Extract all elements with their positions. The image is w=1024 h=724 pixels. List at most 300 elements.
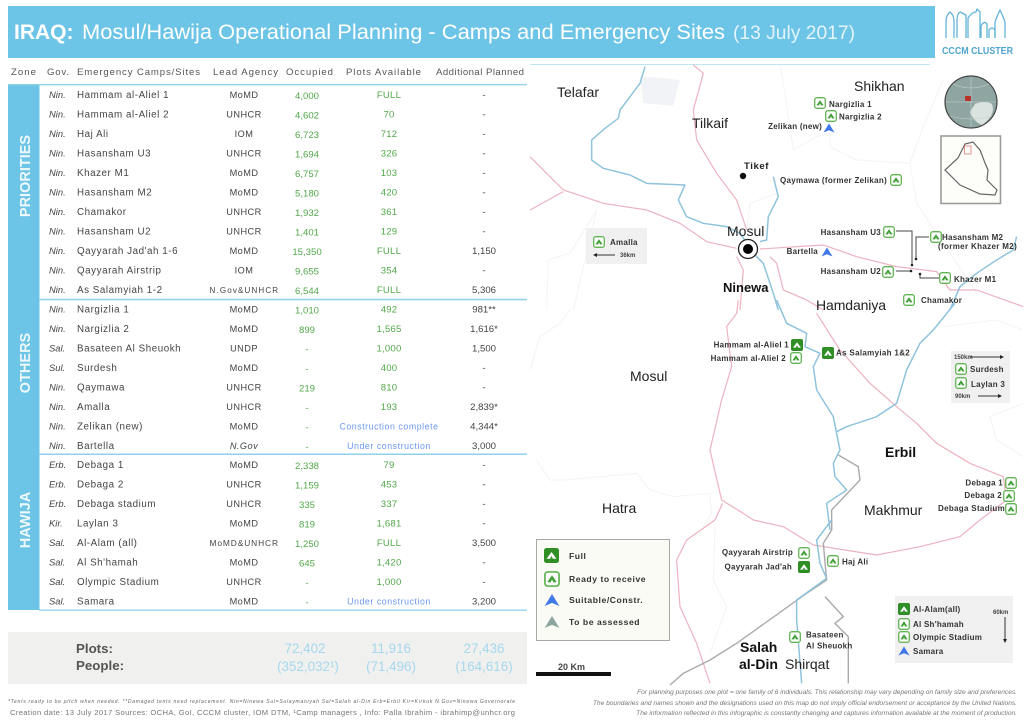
row: Debaga stadium: 335 xyxy=(299,500,315,511)
totals panel: (71,496) xyxy=(366,659,416,674)
row: Hasansham U2 xyxy=(49,226,486,238)
row: Samara: Under construction xyxy=(347,596,431,606)
row: Hasansham U3: Nin. xyxy=(49,148,66,159)
off-map callout: Surdesh and Laylan 3: Surdesh xyxy=(970,365,1004,374)
totals panel: People: xyxy=(76,658,124,673)
totals panel: 11,916 xyxy=(371,641,411,656)
row: Khazer M1 xyxy=(49,167,486,180)
camp: Hasansham U3 xyxy=(821,227,913,266)
row: Nargizlia 2: Nin. xyxy=(49,323,66,334)
map: district and governorate labels: Hatra xyxy=(602,500,636,516)
row: Nargizlia 2: MoMD xyxy=(230,324,258,334)
row: Amalla: - xyxy=(305,403,309,414)
row: Al-Alam (all) xyxy=(49,537,496,550)
table column headers: Additional Planned xyxy=(436,67,524,78)
row: Chamakor: - xyxy=(482,207,486,218)
row: Qaymawa xyxy=(49,381,486,394)
row: As Salamyiah 1-2 xyxy=(49,284,496,297)
camp: Basateen Al Sheuokh: Basateen xyxy=(806,630,844,640)
row: Zelikan (new): - xyxy=(305,422,309,433)
row: As Salamyiah 1-2: 5,306 xyxy=(472,285,496,296)
row: Al-Alam (all): Sal. xyxy=(49,537,65,548)
camp: Amalla xyxy=(586,228,647,264)
row: As Salamyiah 1-2: Nin. xyxy=(49,284,66,295)
row: Haj Ali: Nin. xyxy=(49,128,66,139)
row: Hasansham U2: 1,401 xyxy=(295,228,319,238)
camp: Nargizlia 2 xyxy=(826,111,882,122)
map: Mosul city marker xyxy=(727,223,764,258)
row: Zelikan (new): Zelikan (new) xyxy=(77,421,143,432)
row: Hammam al-Aliel 1: Hammam al-Aliel 1 xyxy=(77,90,169,101)
row: Bartella: N.Gov xyxy=(230,441,259,451)
row: Zelikan (new): MoMD xyxy=(230,421,258,431)
camp: Hammam al-Aliel 1 xyxy=(714,339,803,351)
row: Laylan 3: MoMD xyxy=(230,519,258,529)
row: Qayyarah Jad'ah 1-6 xyxy=(49,245,496,258)
row: Debaga 2: - xyxy=(482,480,486,491)
legend: to be assessed: To be assessed xyxy=(569,617,640,627)
row: Qaymawa: - xyxy=(482,382,486,393)
footnotes: Creation date: 13 July 2017 Sources: OCHA, GoI, CCCM cluster, IOM DTM, ¹Camp managers , Info: Palla Ibrahim - ibrahimp@unhcr.org xyxy=(10,708,515,717)
row: Al-Alam (all): 1,250 xyxy=(295,539,319,550)
row: Nargizlia 1 xyxy=(49,304,496,317)
row: Hammam al-Aliel 1: FULL xyxy=(377,90,402,101)
totals panel: (352,032¹) xyxy=(277,659,339,674)
row: Olympic Stadium: - xyxy=(305,578,309,589)
row: Nargizlia 1: 492 xyxy=(381,305,397,316)
row: Hasansham M2: 420 xyxy=(381,188,397,199)
map: district and governorate labels: Mosul xyxy=(630,368,667,384)
row: Qayyarah Airstrip: Nin. xyxy=(49,264,66,276)
legend: suitable: Suitable/Constr. xyxy=(569,595,643,605)
map: district and governorate labels: Hamdaniya xyxy=(816,297,886,313)
camp: Basateen Al Sheuokh: Al Sheuokh xyxy=(806,642,853,650)
zone label: others: OTHERS xyxy=(18,332,34,393)
row: Debaga 1: 2,338 xyxy=(295,461,319,472)
row: Khazer M1: Khazer M1 xyxy=(77,168,129,179)
row: Basateen Al Sheuokh: 1,000 xyxy=(376,344,402,354)
camp: Hasansham M2: (former Khazer M2) xyxy=(938,242,1017,251)
camp: Amalla: Amalla xyxy=(610,238,638,247)
table column headers: Lead Agency xyxy=(213,67,278,78)
camp: Hasansham M2: Hasansham M2 xyxy=(942,233,1004,242)
off-map callout: Surdesh and Laylan 3 xyxy=(951,351,1010,403)
row: Hasansham U3: 326 xyxy=(381,149,397,160)
locator: Iraq inset xyxy=(941,136,1000,204)
row: Qayyarah Airstrip: IOM xyxy=(235,266,253,276)
row: Qayyarah Jad'ah 1-6: 1,150 xyxy=(472,246,496,257)
row: As Salamyiah 1-2: N.Gov&UNHCR xyxy=(210,286,278,295)
camp: Hasansham U2: Hasansham U2 xyxy=(821,267,881,276)
zone label: hawija: HAWIJA xyxy=(18,491,34,548)
camps table rows xyxy=(49,89,498,608)
row: Debaga 1 xyxy=(49,459,486,472)
row: Chamakor: Chamakor xyxy=(77,207,127,218)
row: Bartella: - xyxy=(305,442,309,453)
row: Hasansham M2: - xyxy=(482,188,486,199)
row: Khazer M1: - xyxy=(482,168,486,179)
row: Al-Alam (all): FULL xyxy=(377,538,402,549)
row: Laylan 3: 1,681 xyxy=(376,519,402,530)
row: Qayyarah Jad'ah 1-6: FULL xyxy=(377,246,402,257)
camp: Haj Ali xyxy=(828,556,868,566)
row: Amalla: 2,839* xyxy=(470,402,498,413)
row: Zelikan (new): 4,344* xyxy=(470,421,498,432)
camp: Qayyarah Jad'ah xyxy=(725,561,810,573)
row: Qayyarah Jad'ah 1-6: MoMD xyxy=(230,246,258,256)
footnotes: *Tents ready to be pitch when needed. **Damaged tents need replacement. Nin=Ninewa Sul=Sulaymaniyah Sal=Salah al-Din Erb=Erbil Kir=Kirkuk N.Gov=Ninewa Governorate xyxy=(8,699,515,705)
row: Hasansham M2: Hasansham M2 xyxy=(77,188,152,199)
table column headers: Emergency Camps/Sites xyxy=(77,67,200,78)
row: Debaga 2: Debaga 2 xyxy=(77,480,124,491)
map: district and governorate labels: Erbil xyxy=(885,444,916,460)
row: Hammam al-Aliel 1 xyxy=(49,89,486,102)
camp: Haj Ali: Haj Ali xyxy=(842,558,868,566)
camp: Qayyarah Airstrip xyxy=(722,548,809,558)
map: rivers xyxy=(592,67,1017,683)
row: Surdesh xyxy=(49,362,486,375)
camp: Zelikan (new): Zelikan (new) xyxy=(768,122,822,131)
row: Laylan 3: 819 xyxy=(299,520,315,531)
row: Debaga 2: 453 xyxy=(381,480,397,491)
row: Nargizlia 1: MoMD xyxy=(230,305,258,315)
map disclaimer xyxy=(593,689,1017,717)
row: Hasansham U2: 129 xyxy=(381,226,397,238)
map disclaimer: The boundaries and names shown and the designations used on this map do not imply official endorsement or acceptance by the United Nations. xyxy=(593,700,1017,707)
row: Khazer M1: MoMD xyxy=(230,168,258,178)
row: Haj Ali: IOM xyxy=(235,129,253,139)
map legend xyxy=(536,540,670,640)
camp: Hasansham U2 xyxy=(821,267,912,277)
row: Amalla: Amalla xyxy=(77,402,110,413)
row: Debaga stadium xyxy=(49,498,486,511)
row: Hammam al-Aliel 2: 4,602 xyxy=(295,110,319,122)
row: Nargizlia 1: Nargizlia 1 xyxy=(77,305,129,316)
row: Olympic Stadium: Sal. xyxy=(49,576,65,587)
off-map callout: Al-Alam group: Olympic Stadium xyxy=(913,633,982,642)
row: Al Sh'hamah: Al Sh'hamah xyxy=(77,558,138,568)
row: Nargizlia 2: 1,565 xyxy=(376,324,402,335)
row: Al Sh'hamah: MoMD xyxy=(230,558,258,568)
camp: Hasansham M2 xyxy=(915,232,1017,260)
row: Hasansham U2: Nin. xyxy=(49,226,66,236)
map: grey roads xyxy=(670,455,860,685)
row: Olympic Stadium: 1,000 xyxy=(376,577,402,588)
row: Surdesh: - xyxy=(305,364,309,375)
row: Basateen Al Sheuokh xyxy=(49,342,496,356)
row: Qaymawa: Qaymawa xyxy=(77,382,125,393)
camp: Zelikan (new) xyxy=(768,122,834,132)
table column headers: Gov. xyxy=(47,67,69,78)
row: Qayyarah Airstrip: Qayyarah Airstrip xyxy=(77,266,162,276)
camp: Debaga 2 xyxy=(964,491,1014,501)
row: Hammam al-Aliel 2: UNHCR xyxy=(226,110,262,120)
row: Hasansham U2: UNHCR xyxy=(226,226,262,236)
row: Qaymawa: 219 xyxy=(299,383,315,394)
row: Hasansham U3: UNHCR xyxy=(226,149,262,159)
row: Surdesh: Sul. xyxy=(49,362,65,373)
row: As Salamyiah 1-2: 6,544 xyxy=(295,286,320,297)
row: Laylan 3: Kir. xyxy=(49,518,63,529)
row: Chamakor: 1,932 xyxy=(295,208,319,219)
row: Basateen Al Sheuokh: Basateen Al Sheuokh xyxy=(77,344,181,354)
legend: full: Full xyxy=(569,551,586,561)
map: district and governorate labels: al-Din xyxy=(739,656,778,672)
row: As Salamyiah 1-2: As Salamyiah 1-2 xyxy=(77,285,163,296)
row: Nargizlia 1: Nin. xyxy=(49,304,66,315)
camp: Nargizlia 1: Nargizlia 1 xyxy=(829,100,872,109)
row: Olympic Stadium: - xyxy=(482,577,486,588)
row: Khazer M1: Nin. xyxy=(49,167,66,178)
row: Zelikan (new): Nin. xyxy=(49,420,66,431)
row: Debaga 2: 1,159 xyxy=(295,481,319,492)
map: top border line xyxy=(530,64,930,65)
camp: Chamakor: Chamakor xyxy=(921,296,962,305)
row: Hammam al-Aliel 2: Hammam al-Aliel 2 xyxy=(77,110,169,120)
row: Hammam al-Aliel 1: 4,000 xyxy=(295,91,319,102)
row: Samara: Sal. xyxy=(49,596,65,606)
row: Samara: - xyxy=(305,598,309,608)
off-map callout: Surdesh and Laylan 3: Laylan 3 xyxy=(971,380,1005,389)
off-map callout: Al-Alam group: Al-Alam(all) xyxy=(913,605,961,614)
locator: globe xyxy=(945,76,997,128)
row: Chamakor: Nin. xyxy=(49,206,66,217)
row: Hammam al-Aliel 1: MoMD xyxy=(230,90,258,100)
row: Bartella xyxy=(49,440,496,453)
map: district and governorate labels: Ninewa xyxy=(723,280,769,295)
row: Amalla xyxy=(49,401,498,414)
row: Qayyarah Airstrip: 354 xyxy=(381,266,398,276)
map: roads xyxy=(530,65,1023,683)
row: Debaga stadium: Erb. xyxy=(49,498,66,509)
row: Samara: Samara xyxy=(77,596,115,608)
camp: Debaga 2: Debaga 2 xyxy=(964,491,1002,500)
camp: Hasansham U3: Hasansham U3 xyxy=(821,228,881,237)
title banner: IRAQ: xyxy=(14,21,74,44)
footnotes xyxy=(8,699,515,717)
off-map callout: Surdesh and Laylan 3: 150km xyxy=(954,355,973,361)
row: Debaga 1: Debaga 1 xyxy=(77,460,124,471)
camp: Hammam al-Aliel 2: Hammam al-Aliel 2 xyxy=(711,354,786,363)
row: Hammam al-Aliel 2: - xyxy=(482,110,486,120)
row: Qayyarah Jad'ah 1-6: 15,350 xyxy=(292,247,322,258)
row: Chamakor: 361 xyxy=(381,207,397,218)
row: Samara: MoMD xyxy=(230,596,258,606)
row: Laylan 3: - xyxy=(482,519,486,530)
row: Chamakor: UNHCR xyxy=(226,207,262,217)
row: Debaga stadium: 337 xyxy=(381,499,397,510)
row: Al Sh'hamah: 1,420 xyxy=(376,558,402,568)
row: Hasansham M2: MoMD xyxy=(230,188,258,198)
row: Debaga 2: UNHCR xyxy=(226,480,262,490)
row: Basateen Al Sheuokh: - xyxy=(305,344,309,356)
zone label: priorities: PRIORITIES xyxy=(18,135,34,217)
camp: Nargizlia 2: Nargizlia 2 xyxy=(839,112,882,122)
camp: Basateen Al Sheuokh xyxy=(790,630,853,650)
row: Surdesh: 400 xyxy=(381,363,397,374)
row: Chamakor xyxy=(49,206,486,219)
camp: Chamakor xyxy=(904,295,962,305)
row: Basateen Al Sheuokh: 1,500 xyxy=(472,344,496,354)
camp: Nargizlia 1 xyxy=(815,98,872,109)
row: Nargizlia 2: Nargizlia 2 xyxy=(77,324,129,335)
row: Hammam al-Aliel 2: 70 xyxy=(383,110,395,120)
row: Debaga 1: MoMD xyxy=(230,460,258,470)
scale bar: 20 Km xyxy=(558,662,585,672)
map: district and governorate labels xyxy=(557,78,923,672)
camp: Debaga Stadium: Debaga Stadium xyxy=(938,504,1005,513)
row: Al-Alam (all): Al-Alam (all) xyxy=(77,538,138,549)
row: Nargizlia 2 xyxy=(49,323,498,336)
row: Haj Ali: 712 xyxy=(381,129,397,140)
row: Nargizlia 1: 981** xyxy=(472,305,496,316)
row: Surdesh: MoMD xyxy=(230,363,258,373)
map: district boundaries xyxy=(530,65,1023,653)
title banner: (13 July 2017) xyxy=(733,23,855,44)
scale bar xyxy=(536,662,611,676)
row: Al-Alam (all): 3,500 xyxy=(472,538,496,549)
camp: Bartella xyxy=(787,247,832,256)
row: Haj Ali: - xyxy=(482,129,486,140)
row: As Salamyiah 1-2: FULL xyxy=(377,285,402,296)
camp: Debaga 1 xyxy=(965,478,1016,488)
row: Bartella: Bartella xyxy=(77,441,115,452)
map: district and governorate labels: Shikhan xyxy=(854,78,905,94)
row: Al-Alam (all): MoMD&UNHCR xyxy=(210,538,278,548)
row: Hasansham U3: 1,694 xyxy=(295,150,320,161)
row: Zelikan (new): Construction complete xyxy=(339,421,439,431)
row: Debaga 2: Erb. xyxy=(49,479,66,490)
map: district and governorate labels: Makhmur xyxy=(864,502,923,518)
off-map callout: Al-Alam group: 60km xyxy=(993,610,1008,616)
icon: CCCM cluster logo xyxy=(942,9,1014,57)
row: Debaga 1: 79 xyxy=(383,460,395,471)
row: Debaga 2 xyxy=(49,479,486,492)
map disclaimer: The information reflected in this infographic is constantly changing and captures information available at the moment of production. xyxy=(636,710,1017,717)
row: Hasansham M2: Nin. xyxy=(49,187,66,198)
row: Olympic Stadium xyxy=(49,576,486,589)
table column headers: Occupied xyxy=(286,67,333,78)
row: Samara: 3,200 xyxy=(472,596,496,608)
camp: As Salamyiah 1&2: As Salamyiah 1&2 xyxy=(836,348,910,358)
row: Al Sh'hamah: 645 xyxy=(299,558,315,570)
row: Olympic Stadium: UNHCR xyxy=(226,577,262,587)
totals panel: Plots: xyxy=(76,641,113,656)
icon: CCCM cluster logo: CCCM CLUSTER xyxy=(942,46,1014,57)
off-map callout: Al-Alam group: Samara xyxy=(913,647,944,656)
off-map callout: Al-Alam group: Al Sh'hamah xyxy=(913,620,964,629)
map: Mosul city marker: Mosul xyxy=(727,223,764,239)
row: Surdesh: Surdesh xyxy=(77,363,117,374)
row: Qayyarah Jad'ah 1-6: Qayyarah Jad'ah 1-6 xyxy=(77,246,178,257)
row: Hasansham M2 xyxy=(49,187,486,200)
row: Qaymawa: 810 xyxy=(381,382,397,393)
row: Laylan 3 xyxy=(49,518,486,531)
row: Al Sh'hamah: - xyxy=(482,558,486,568)
camp: Debaga 1: Debaga 1 xyxy=(965,478,1003,488)
row: Debaga stadium: Debaga stadium xyxy=(77,499,156,510)
legend: ready: Ready to receive xyxy=(569,574,646,584)
row: Olympic Stadium: Olympic Stadium xyxy=(77,577,159,588)
row: Hammam al-Aliel 1: - xyxy=(482,90,486,101)
row: Surdesh: - xyxy=(482,363,486,374)
row: Debaga 1: Erb. xyxy=(49,459,66,470)
row: Hasansham U3: Hasansham U3 xyxy=(77,149,151,160)
row: Nargizlia 1: 1,010 xyxy=(295,306,319,317)
map: district and governorate labels: Salah xyxy=(740,639,777,655)
camp: Bartella: Bartella xyxy=(787,247,818,256)
map: Tikef town: Tikef xyxy=(744,161,769,172)
row: Khazer M1: 103 xyxy=(381,168,397,179)
table zone separators xyxy=(8,84,527,611)
totals panel: 27,436 xyxy=(464,641,504,656)
row: Qayyarah Jad'ah 1-6: Nin. xyxy=(49,245,66,256)
off-map callout: Al-Alam group xyxy=(895,596,1013,663)
table column headers: Zone xyxy=(11,67,36,78)
map: lake xyxy=(640,76,680,106)
title banner xyxy=(8,6,935,58)
row: Qaymawa: Nin. xyxy=(49,381,66,392)
camp: Qayyarah Jad'ah: Qayyarah Jad'ah xyxy=(725,562,792,572)
map: district and governorate labels: Shirqat xyxy=(785,656,829,672)
row: Nargizlia 2: 899 xyxy=(299,325,315,336)
row: Khazer M1: 6,757 xyxy=(295,169,319,180)
row: Hammam al-Aliel 1: Nin. xyxy=(49,89,66,100)
row: Amalla: 193 xyxy=(381,402,397,413)
totals panel xyxy=(8,632,527,684)
row: Bartella: Nin. xyxy=(49,440,66,451)
off-map callout: Surdesh and Laylan 3: 90km xyxy=(955,394,970,400)
row: Qayyarah Airstrip xyxy=(49,264,486,278)
row: Debaga stadium: UNHCR xyxy=(226,499,262,509)
row: Qayyarah Airstrip: 9,655 xyxy=(295,266,319,278)
row: Hasansham U2: Hasansham U2 xyxy=(77,226,151,238)
map: Tikef town xyxy=(740,161,769,179)
row: Haj Ali: Haj Ali xyxy=(77,129,109,140)
camp: Khazer M1 xyxy=(919,273,997,284)
table column headers xyxy=(11,67,524,78)
row: Zelikan (new) xyxy=(49,420,498,433)
row: Qaymawa: UNHCR xyxy=(226,382,262,392)
table column headers: Plots Available xyxy=(346,67,421,78)
row: Qayyarah Airstrip: - xyxy=(482,266,486,276)
row: Debaga stadium: - xyxy=(482,499,486,510)
title banner: Mosul/Hawija Operational Planning - Camps and Emergency Sites xyxy=(82,21,725,44)
map: district and governorate labels: Tilkaif xyxy=(692,115,728,131)
camp: As Salamyiah 1&2 xyxy=(822,347,910,359)
row: Amalla: UNHCR xyxy=(226,402,262,412)
row: Nargizlia 2: 1,616* xyxy=(470,324,498,335)
totals panel: (164,616) xyxy=(455,659,513,674)
camp: Hammam al-Aliel 1: Hammam al-Aliel 1 xyxy=(714,340,789,350)
row: Debaga 1: - xyxy=(482,460,486,471)
totals panel: 72,402 xyxy=(285,641,325,656)
row: Hammam al-Aliel 2 xyxy=(49,108,486,122)
row: Hammam al-Aliel 2: Nin. xyxy=(49,108,66,120)
zone sidebar xyxy=(8,84,40,610)
row: Al Sh'hamah xyxy=(49,556,486,570)
camp: Amalla: 36km xyxy=(620,253,635,259)
row: Al Sh'hamah: Sal. xyxy=(49,556,65,568)
camp: Qayyarah Airstrip: Qayyarah Airstrip xyxy=(722,548,793,557)
row: Samara xyxy=(49,596,496,608)
row: Basateen Al Sheuokh: Sal. xyxy=(49,342,65,354)
row: Laylan 3: Laylan 3 xyxy=(77,519,118,530)
row: Haj Ali xyxy=(49,128,486,141)
row: Haj Ali: 6,723 xyxy=(295,130,319,141)
map: district and governorate labels: Telafar xyxy=(557,84,599,100)
row: Hasansham U3 xyxy=(49,148,486,161)
